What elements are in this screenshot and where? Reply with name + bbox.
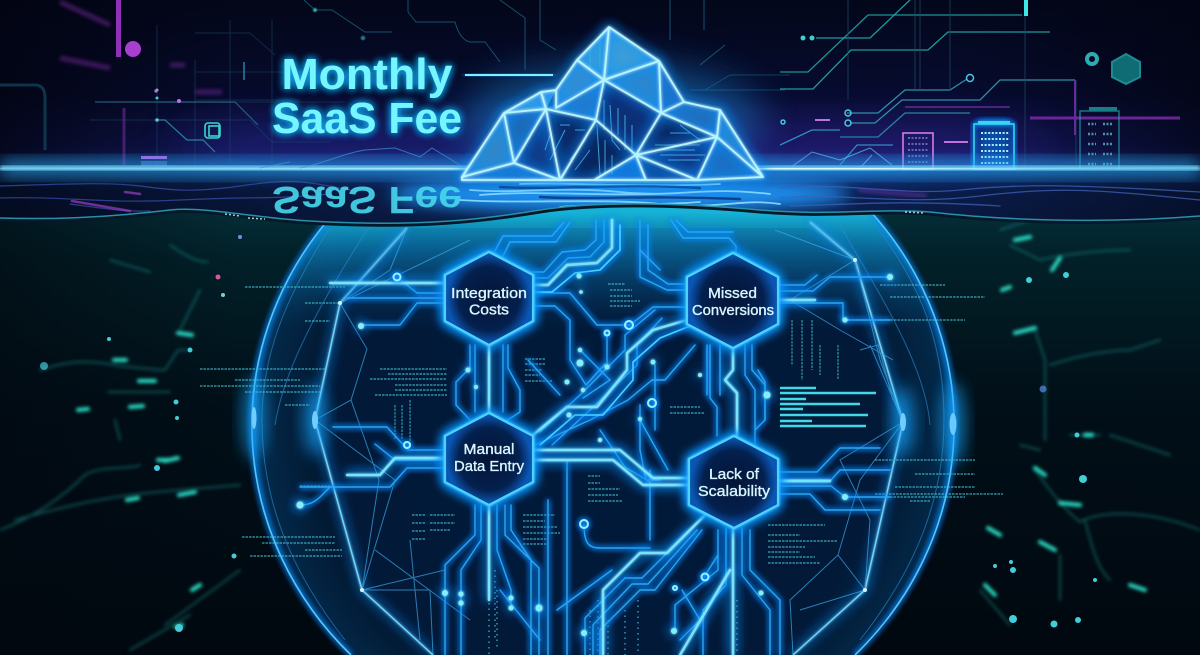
connector line from title to iceberg (465, 74, 553, 76)
icon: circuit nodes (781, 74, 974, 126)
iceberg outline (462, 27, 763, 180)
hexagon: Manual Data Entry: Manual (464, 441, 514, 458)
hexagon: Lack of Scalability: Scalability (698, 483, 771, 500)
panel: top center faint circuit (304, 0, 790, 170)
inner polygon shell (262, 222, 944, 655)
icon: pink building (903, 133, 933, 170)
icon: cyan building (974, 121, 1014, 170)
hexagon: Missed Conversions: Missed (708, 285, 757, 302)
iceberg facets (462, 27, 763, 180)
panel: left digital skyline (0, 0, 345, 170)
iceberg circuit etching (545, 40, 705, 175)
left underwater streaks (0, 235, 242, 650)
outer shell ring (262, 225, 944, 640)
icon: chip (205, 123, 220, 138)
hexagon: Integration Costs: Costs (469, 302, 509, 318)
hexagon: Missed Conversions: Conversions (692, 302, 774, 319)
thin traces (300, 220, 890, 655)
icon: tall building (1080, 107, 1119, 171)
title: Monthly SaaS Fee (272, 50, 462, 143)
hexagon: Lack of Scalability (689, 436, 778, 528)
hexagon: Integration Costs (445, 252, 533, 345)
icon: purple dot (125, 41, 141, 57)
icon: ring (1087, 54, 1097, 64)
wave boundary line (0, 204, 1200, 225)
panel: glowing sphere (242, 200, 965, 655)
right underwater streaks (980, 215, 1200, 628)
sphere flare points (252, 258, 956, 592)
bright traces (330, 220, 830, 655)
title reflection: SaaS Fee mirrored in water: SaaS Fee (272, 178, 462, 220)
title: Monthly SaaS Fee: Monthly (282, 50, 453, 99)
hexagon: Manual Data Entry (445, 413, 533, 505)
micro text blocks around sphere (200, 284, 1003, 563)
horizon glow line (0, 148, 1200, 176)
icon: purple bar (116, 0, 121, 57)
hexagon: Manual Data Entry: Data Entry (454, 458, 524, 475)
circuit nodes (296, 274, 893, 636)
title: Monthly SaaS Fee: SaaS Fee (272, 94, 462, 143)
panel: right digital skyline (780, 0, 1180, 171)
iceberg: monthly SaaS fee tip (462, 27, 763, 180)
panel: sky background (0, 0, 1200, 172)
circuit traces (300, 220, 890, 655)
icon: hexagon (1112, 54, 1140, 84)
hexagon: Missed Conversions (687, 253, 778, 348)
panel: underwater background (0, 200, 1200, 655)
panel: water surface band (0, 170, 1200, 230)
hexagon: Integration Costs: Integration (451, 285, 527, 302)
hexagon: Lack of Scalability: Lack of (709, 466, 760, 483)
